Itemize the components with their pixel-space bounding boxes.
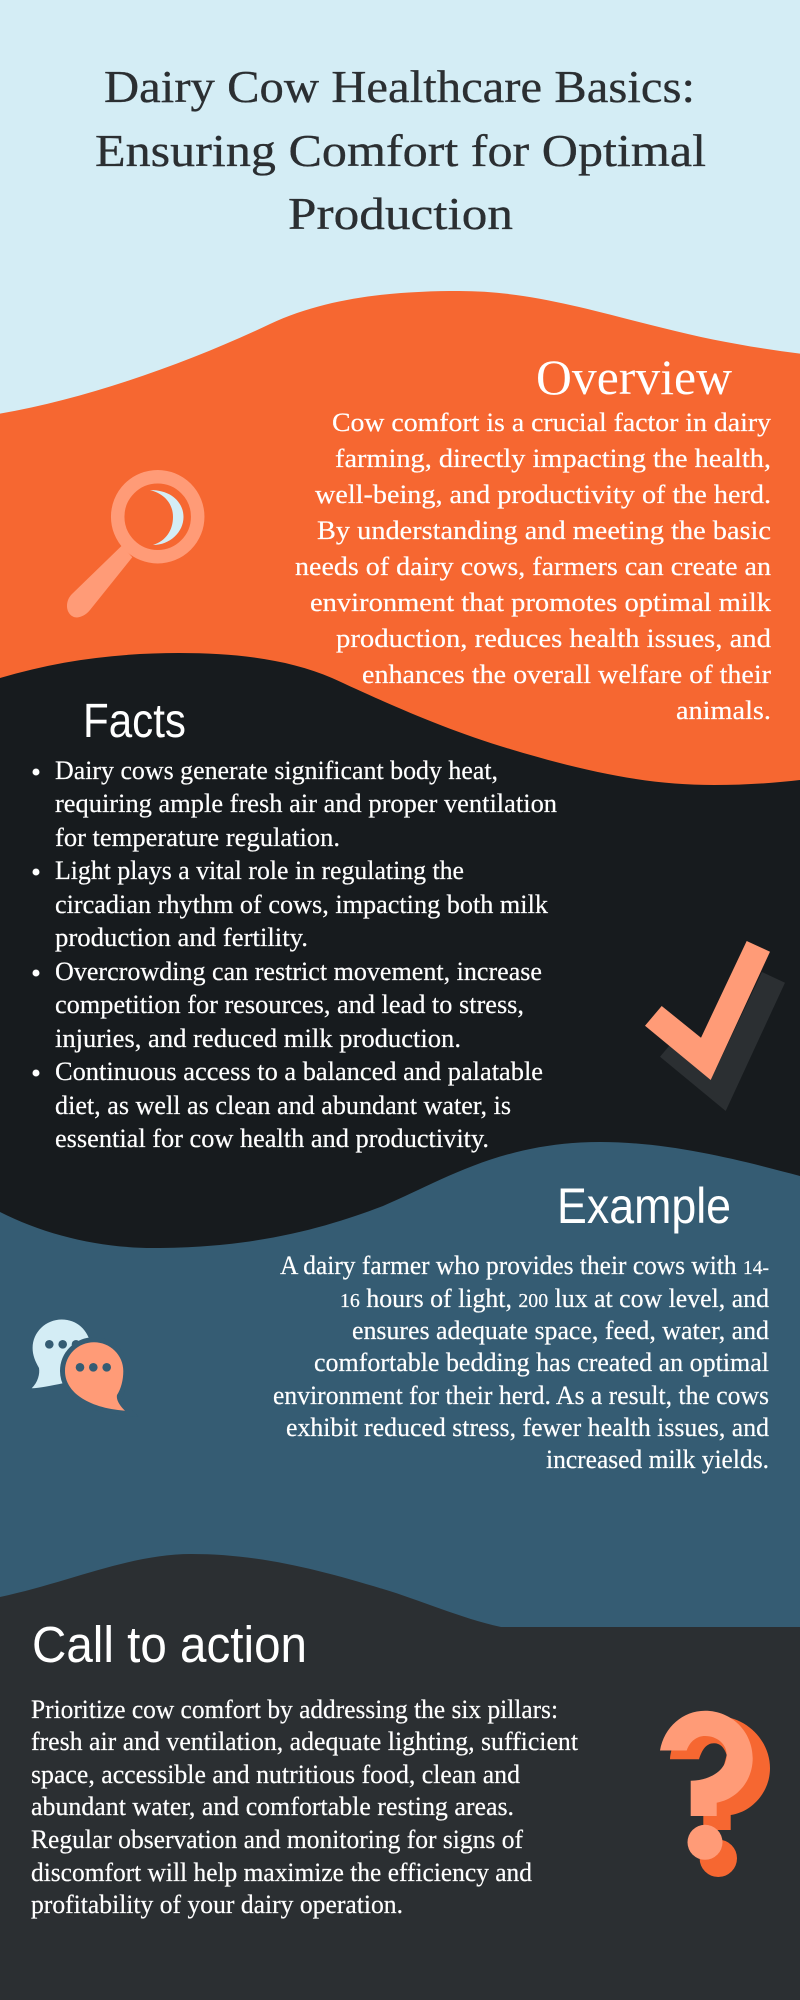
icon: chat bubbles [32,1320,125,1411]
text block: call to action body [31,1695,579,1919]
text block: example body: comfortable bedding has created an optimal [314,1348,769,1377]
text block: call to action body: Regular observation and monitoring for signs of [31,1825,523,1854]
heading: overview: Overview [536,349,732,405]
title [95,61,706,239]
list: facts bullets: diet, as well as clean and abundant water, is [55,1091,511,1120]
list: facts bullets: production and fertility. [55,923,308,952]
list: facts bullets: Continuous access to a balanced and palatable [55,1057,543,1086]
text block: overview body: Cow comfort is a crucial factor in dairy [332,408,771,437]
list: facts bullets: requiring ample fresh air and proper ventilation [55,789,557,818]
text block: example body [273,1251,769,1474]
heading: example: Example [557,1178,731,1234]
list: facts bullets [33,756,557,1153]
text block: overview body [295,408,771,725]
text block: example body: 16 hours of light, 200 lux at cow level, and [340,1284,769,1313]
list: facts bullets: Dairy cows generate significant body heat, [55,756,498,785]
text block: call to action body: discomfort will help maximize the efficiency and [31,1858,532,1887]
panel: example band [0,1142,800,2000]
list: facts bullets: Overcrowding can restrict movement, increase [55,957,542,986]
title: Production [288,188,513,239]
text block: overview body: animals. [676,696,771,725]
list: facts bullets: injuries, and reduced milk production. [55,1024,461,1053]
text block: overview body: farming, directly impacting the health, [335,444,771,473]
heading: call to action: Call to action [32,1616,307,1673]
text block: call to action body: profitability of your dairy operation. [31,1890,403,1919]
title: Ensuring Comfort for Optimal [95,125,706,176]
text block: call to action body: Prioritize cow comfort by addressing the six pillars: [31,1695,558,1724]
list: facts bullets: competition for resources, and lead to stress, [55,990,524,1019]
heading: facts: Facts [83,695,186,748]
icon: magnifying glass [67,477,198,618]
panel: call to action band [0,1554,800,2000]
text block: overview body: environment that promotes optimal milk [310,588,771,617]
title: Dairy Cow Healthcare Basics: [104,61,695,112]
list: facts bullets: essential for cow health and productivity. [55,1124,489,1153]
text block: call to action body: fresh air and ventilation, adequate lighting, sufficient [31,1727,579,1756]
text block: call to action body: abundant water, and comfortable resting areas. [31,1792,514,1821]
text block: overview body: production, reduces health issues, and [336,624,771,653]
text block: example body: environment for their herd. As a result, the cows [273,1381,769,1410]
panel: facts band [0,653,800,2000]
text block: example body: A dairy farmer who provides their cows with 14- [280,1251,769,1280]
list: facts bullets: circadian rhythm of cows, impacting both milk [55,890,548,919]
text block: example body: exhibit reduced stress, fewer health issues, and [286,1413,769,1442]
text block: example body: increased milk yields. [546,1445,769,1474]
text block: overview body: well-being, and productivity of the herd. [315,480,771,509]
list: facts bullets: Light plays a vital role in regulating the [55,856,464,885]
text block: overview body: enhances the overall welfare of their [362,660,771,689]
icon: question mark [660,1711,770,1877]
list: facts bullets: for temperature regulation. [55,823,340,852]
text block: call to action body: space, accessible and nutritious food, clean and [31,1760,520,1789]
icon: check mark [645,941,785,1111]
text block: overview body: needs of dairy cows, farmers can create an [295,552,771,581]
text block: example body: ensures adequate space, feed, water, and [352,1316,769,1345]
text block: overview body: By understanding and meeting the basic [317,516,771,545]
